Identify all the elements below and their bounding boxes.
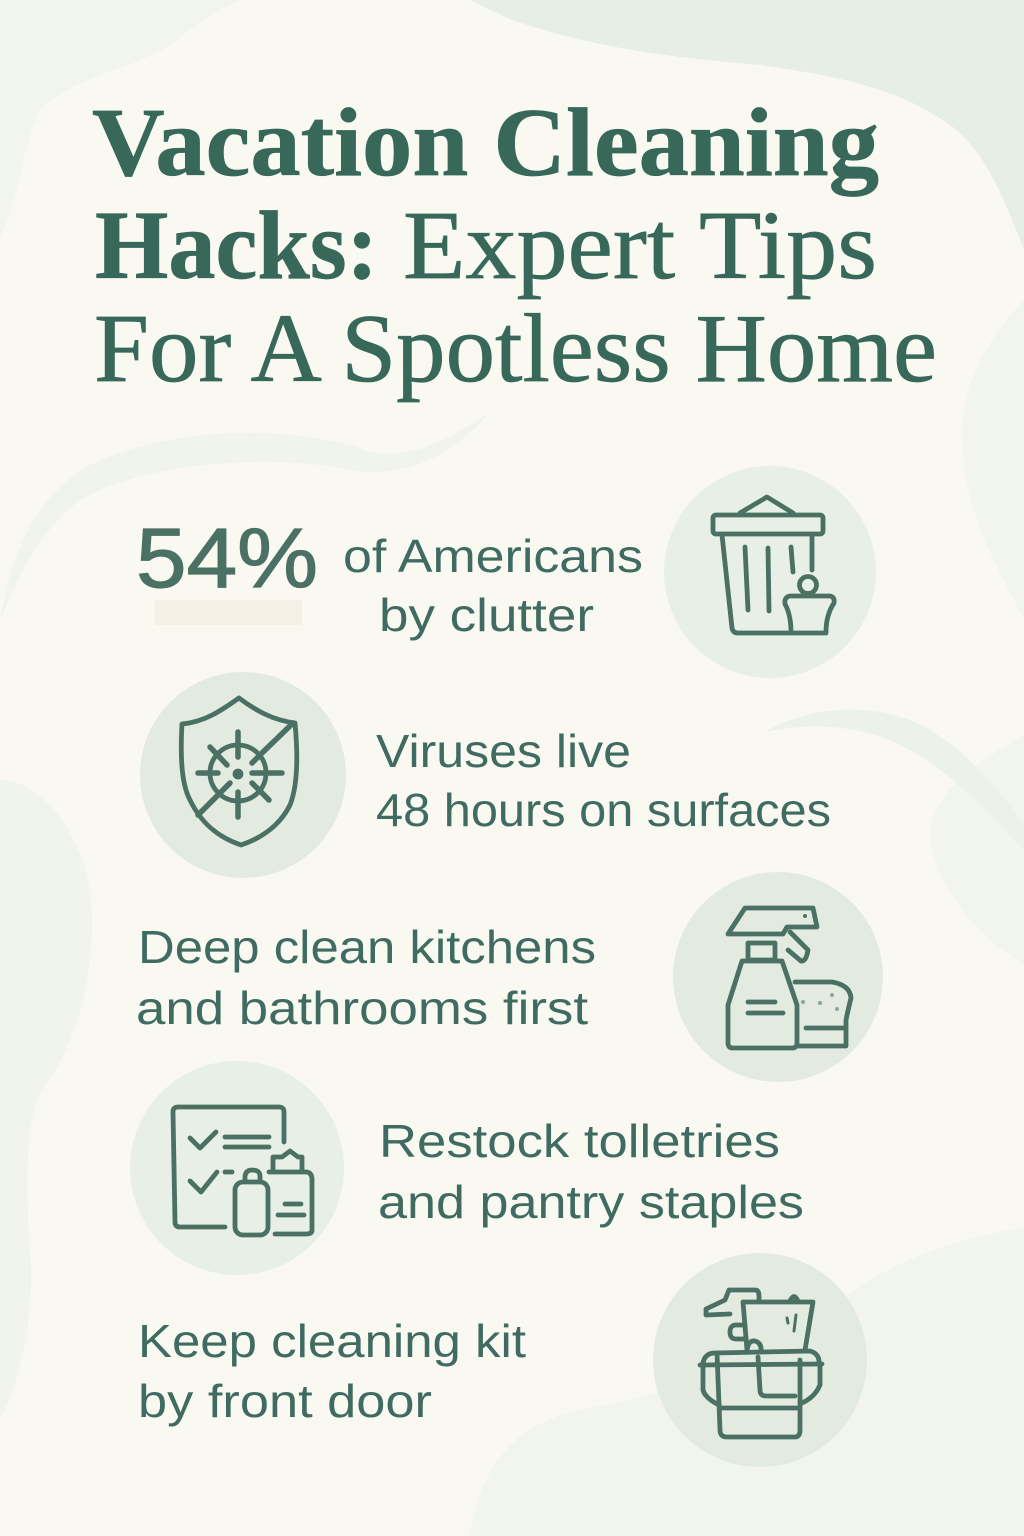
- text: deep clean: [136, 921, 596, 1034]
- text: clutter: by clutter: [379, 589, 594, 641]
- row 2: viruses: [140, 672, 831, 878]
- text: restock: Restock tolletries: [379, 1115, 780, 1167]
- stat highlight bar: [155, 600, 302, 625]
- icon: cleaning kit basket: [653, 1253, 867, 1467]
- text: viruses: 48 hours on surfaces: [376, 784, 831, 836]
- text: restock: [378, 1115, 804, 1228]
- icon: virus shield: [140, 672, 346, 878]
- row 1: clutter statistic: [136, 466, 876, 678]
- title: [92, 89, 937, 403]
- title: For A Spotless Home: [94, 295, 937, 403]
- title: Expert Tips: [403, 192, 877, 300]
- text: clutter: of Americans: [343, 530, 643, 582]
- row 5: cleaning kit: [138, 1253, 867, 1467]
- row 4: restock: [130, 1061, 804, 1275]
- row 3: deep clean: [136, 872, 883, 1082]
- text: deep clean: Deep clean kitchens: [138, 921, 596, 973]
- text: clutter: [343, 530, 643, 641]
- text: cleaning kit: [138, 1315, 526, 1427]
- title: Vacation Cleaning: [92, 89, 879, 197]
- icon: checklist and bottles: [130, 1061, 344, 1275]
- text: restock: and pantry staples: [378, 1176, 804, 1228]
- icon: spray bottle and sponge: [673, 872, 883, 1082]
- text: deep clean: and bathrooms first: [136, 982, 588, 1034]
- text: cleaning kit: by front door: [138, 1375, 432, 1427]
- text: viruses: [376, 725, 831, 836]
- icon: trash can and pot: [664, 466, 876, 678]
- text: viruses: Viruses live: [376, 725, 631, 777]
- stat number: 54%: [136, 511, 318, 605]
- title: Hacks:: [95, 192, 378, 300]
- text: cleaning kit: Keep cleaning kit: [138, 1315, 526, 1367]
